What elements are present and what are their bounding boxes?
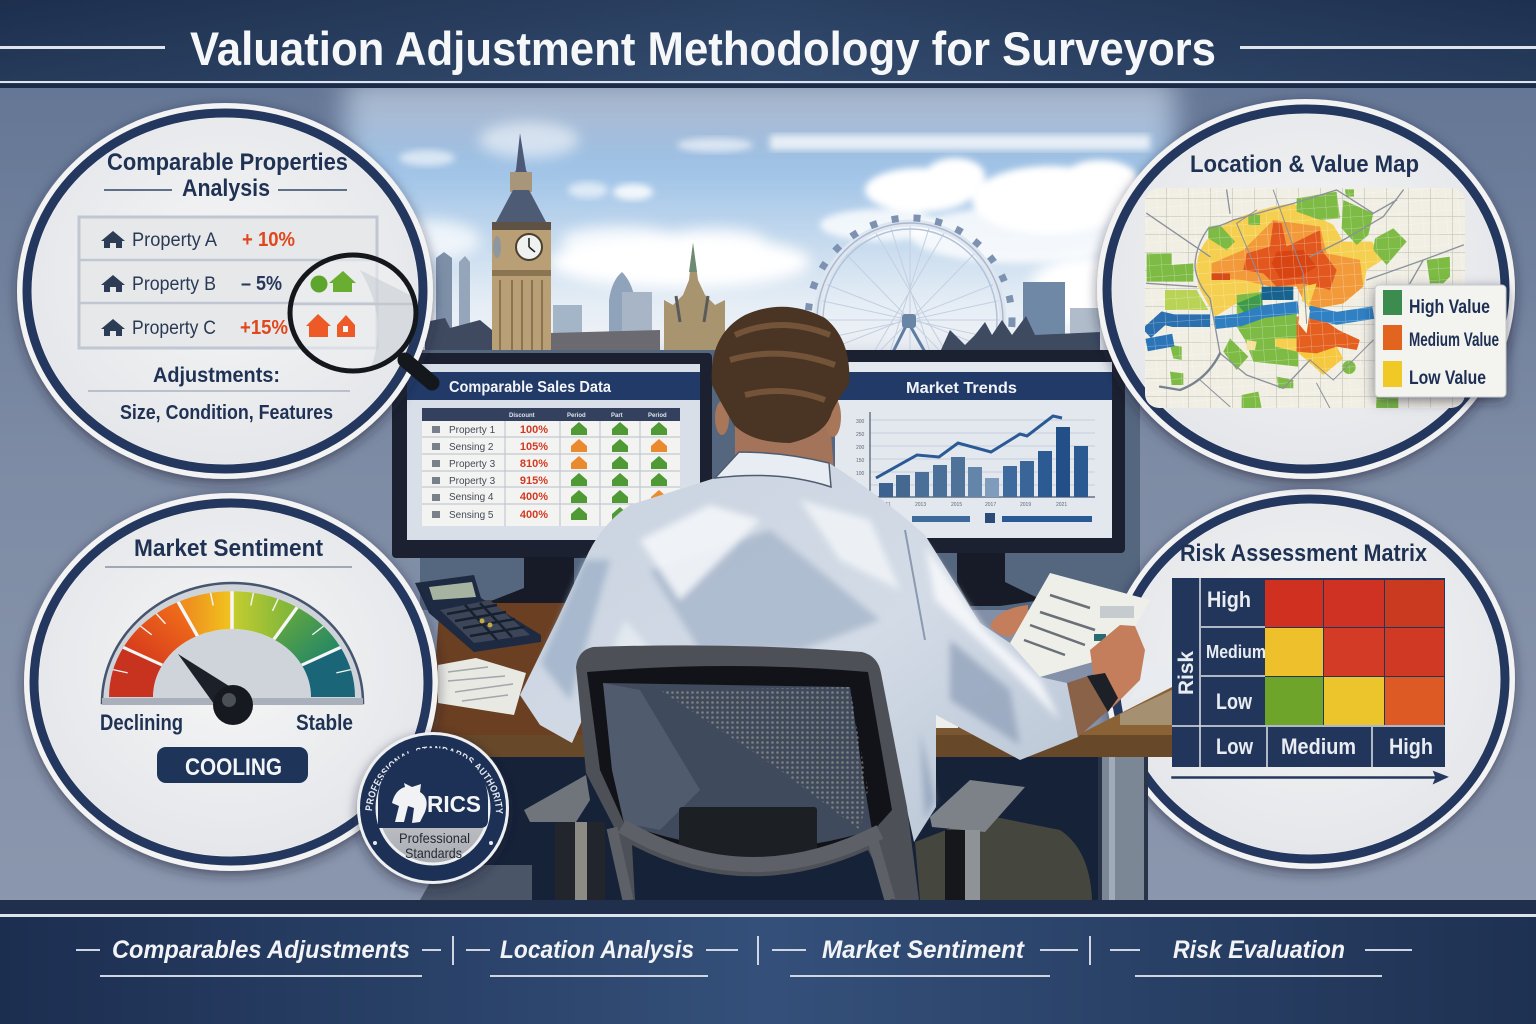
lower backdrop behind monitors	[420, 350, 1140, 610]
axis labels: High	[1389, 734, 1433, 759]
collar	[715, 452, 831, 487]
footer item: market sentiment: Market Sentiment	[822, 936, 1026, 964]
comparable sales table: Period	[567, 413, 586, 419]
panel: location and value map	[1097, 99, 1515, 479]
property adjustments table	[79, 217, 377, 348]
map legend: Medium Value	[1409, 330, 1499, 351]
monitor: Market Trends	[835, 350, 1125, 606]
screen heading: Comparable Sales Data	[449, 379, 611, 396]
risk matrix: Risk	[1175, 651, 1198, 695]
footer item: risk evaluation: Risk Evaluation	[1173, 936, 1345, 964]
panel contents: risk assessment matrix	[1172, 540, 1447, 783]
market trend chart: 2011	[880, 502, 891, 508]
screen heading: Market Trends	[906, 380, 1017, 397]
right armrest	[930, 780, 1025, 832]
right forearm	[1067, 672, 1114, 737]
market trend chart: 2015	[951, 502, 962, 508]
panel: comparable properties analysis	[17, 103, 433, 479]
axis labels: High	[1207, 587, 1251, 612]
market trend chart: 250	[856, 432, 865, 438]
paperwork on desk	[438, 658, 960, 728]
property adjustments table: +15%	[240, 317, 288, 339]
comparable sales table: Sensing 2	[449, 442, 494, 453]
icon: London Eye	[808, 218, 1012, 422]
property adjustments table: Property A	[132, 230, 217, 251]
hair	[712, 307, 849, 443]
panel heading: Location & Value Map	[1190, 151, 1419, 178]
legs	[915, 815, 1092, 900]
sentiment status pill: COOLING	[185, 754, 282, 781]
icon: Big Ben clock tower	[492, 133, 551, 354]
office chair	[524, 645, 1025, 900]
comparable sales table: Part	[611, 413, 623, 419]
property adjustments table: Property C	[132, 318, 216, 339]
map legend: Low Value	[1409, 368, 1486, 389]
surveyor seen from behind	[520, 307, 1172, 900]
title: Valuation Adjustment Methodology for Surveyors	[190, 22, 1216, 75]
curved badge lettering: PROFESSIONAL STANDARDS AUTHORITY	[365, 746, 503, 814]
sentiment status pill	[157, 747, 308, 783]
chair frame	[576, 645, 919, 900]
mesh back	[603, 683, 872, 848]
neck	[735, 420, 834, 472]
icon: magnifying glass	[290, 255, 432, 383]
comparable sales table: Sensing 4	[449, 492, 494, 503]
choropleth map	[1145, 188, 1465, 408]
distant towers	[436, 252, 1100, 342]
comparable sales table: 915%	[520, 475, 548, 487]
orange districts	[1212, 220, 1363, 308]
calculator	[415, 575, 541, 652]
panel backplate: risk assessment circle	[1105, 489, 1515, 869]
market trend chart: 2019	[1020, 502, 1031, 508]
axis labels: Low	[1216, 689, 1253, 714]
shirt folds	[541, 500, 1060, 820]
footer band	[0, 900, 1536, 1024]
badge: RICS Professional Standards	[348, 728, 509, 895]
left armrest	[524, 775, 590, 822]
central city skyline scene	[345, 80, 1175, 422]
river	[1147, 307, 1373, 345]
market trend chart: 50	[856, 484, 862, 490]
document held up	[1010, 573, 1150, 677]
comparable sales table: Property 3	[449, 459, 496, 470]
axis labels: Low	[1216, 734, 1254, 759]
right hand	[1090, 625, 1145, 708]
comparable sales table	[422, 408, 680, 526]
market trend chart: 2017	[985, 502, 996, 508]
green and orange status houses	[571, 422, 667, 520]
badge upper field	[378, 748, 488, 828]
map legend	[1375, 285, 1506, 397]
comparable sales table: 100%	[520, 424, 548, 436]
watch	[1087, 673, 1118, 712]
arrow: increasing impact	[1172, 772, 1447, 783]
risk matrix	[1172, 578, 1445, 767]
panel: market sentiment: Stable	[296, 710, 353, 735]
badge caption: Professional	[399, 830, 470, 846]
sentiment gauge	[102, 583, 363, 725]
axis labels: Medium	[1206, 642, 1266, 662]
panel heading: Risk Assessment Matrix	[1180, 540, 1428, 567]
axis labels	[1206, 587, 1433, 759]
panel heading: Comparable Properties	[107, 149, 348, 176]
ears	[715, 401, 729, 435]
property adjustments table: + 10%	[242, 229, 295, 251]
footer item: location analysis: Location Analysis	[500, 936, 694, 964]
comparable sales table: 400%	[520, 491, 548, 503]
seat base	[632, 845, 893, 900]
market trend chart: 2013	[915, 502, 926, 508]
property adjustments table: Property B	[132, 274, 216, 295]
market trend chart: 150	[856, 458, 865, 464]
badge: RICS Professional Standards: Standards	[405, 845, 462, 861]
panel: market sentiment	[24, 493, 438, 871]
green status icons	[310, 276, 328, 292]
market trend chart: 100	[856, 471, 865, 477]
lumbar support	[679, 807, 817, 857]
map legend: High Value	[1409, 297, 1490, 318]
south districts	[1297, 347, 1343, 375]
panel heading: Market Sentiment	[134, 535, 323, 562]
property adjustments table: – 5%	[241, 273, 282, 295]
market trend chart	[856, 412, 1095, 523]
market trend chart: 200	[856, 445, 865, 451]
market trend chart: 300	[856, 419, 865, 425]
comparable sales table: Period	[648, 413, 667, 419]
comparable sales table: Discount	[509, 413, 535, 419]
gauge labels: Declining	[100, 710, 183, 735]
comparable sales table: 105%	[520, 441, 548, 453]
orange status icons	[306, 314, 331, 337]
shirt	[520, 452, 1078, 842]
comparable sales table: Property 1	[449, 425, 496, 436]
comparable sales table: Sensing 5	[449, 510, 494, 521]
Thames-side silhouettes	[425, 316, 1100, 352]
monitor: Comparable Sales Data	[392, 353, 712, 603]
panel heading: Analysis	[182, 175, 270, 202]
comparable sales table: 400%	[520, 509, 548, 521]
yellow districts	[1196, 203, 1385, 317]
icon: lion crest	[392, 783, 427, 823]
icon: Houses of Parliament tower	[664, 243, 725, 352]
adjustments heading: Adjustments:	[153, 364, 280, 387]
header band	[0, 0, 1536, 88]
gauge needle	[178, 654, 229, 704]
left hand	[990, 605, 1028, 637]
comparable sales table: 810%	[520, 458, 548, 470]
badge wordmark: RICS	[427, 791, 481, 817]
desk and lower room	[420, 600, 1172, 900]
market trend chart: 2021	[1056, 502, 1067, 508]
axis labels: Medium	[1281, 734, 1356, 759]
footer item: comparables adjustments: Comparables Adjustments	[112, 936, 410, 964]
second paper on desk	[1130, 660, 1172, 700]
adjustment factors: Size, Condition, Features	[120, 402, 333, 424]
green districts	[1147, 189, 1450, 408]
comparable sales table: Property 3	[449, 476, 496, 487]
panel heading	[107, 149, 348, 202]
